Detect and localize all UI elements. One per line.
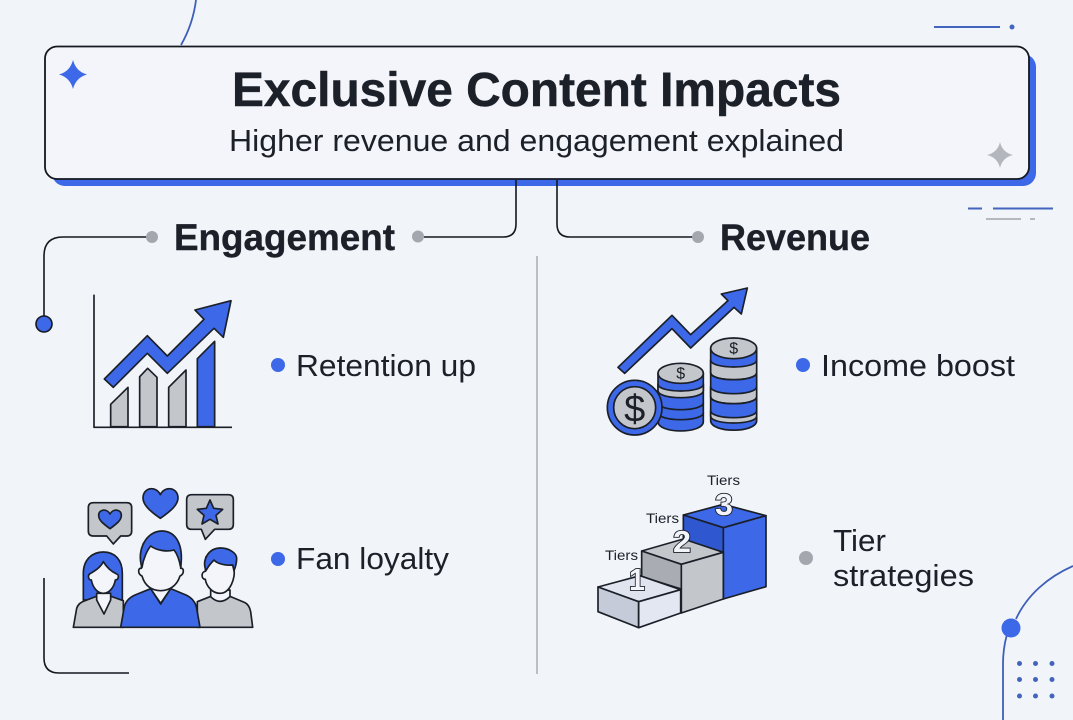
item: Tier strategies: Tier (833, 523, 886, 558)
woman (73, 552, 123, 627)
item: Income boost: Income boost (821, 348, 1015, 383)
icon: blue sparkle (59, 60, 87, 89)
tier labels: Tiers (646, 511, 679, 526)
icon: gray sparkle (987, 142, 1013, 168)
front coin (607, 380, 662, 435)
icon: growth bar chart (94, 295, 232, 427)
step 3 (683, 504, 766, 599)
item: Tier strategies (799, 523, 974, 593)
tier labels (605, 473, 740, 597)
decorative lines top right (934, 24, 1014, 30)
short coin stack (658, 363, 703, 431)
front coin: $ (624, 388, 645, 430)
item: Fan loyalty: Fan loyalty (296, 541, 450, 576)
step 1 (598, 576, 681, 628)
title panel (45, 46, 1036, 186)
arrow (618, 288, 747, 373)
man right (197, 548, 253, 627)
item: Retention up: Retention up (296, 348, 476, 383)
decorative lines right of header (968, 208, 1053, 219)
tier labels: 2 (673, 524, 691, 559)
connector: engagement left (36, 231, 158, 332)
step 2 (642, 539, 723, 613)
icon: coins and arrow (607, 288, 757, 435)
decorative arc and dots bottom right (1002, 566, 1073, 720)
man center (121, 531, 200, 627)
tier labels: 3 (715, 487, 733, 522)
bracket bottom left (44, 578, 129, 673)
decorative arc top left (181, 0, 196, 45)
tier labels: Tiers (605, 548, 638, 563)
short coin stack: $ (676, 366, 685, 383)
subtitle: Higher revenue and engagement explained (229, 123, 844, 158)
heading: Engagement: Engagement (174, 217, 395, 258)
item: Tier strategies: strategies (833, 558, 974, 593)
icon: fans group (73, 489, 253, 627)
tall coin stack: $ (729, 341, 738, 358)
speech bubble heart (88, 503, 132, 544)
tall coin stack (711, 338, 757, 430)
icon: tier steps (598, 504, 766, 628)
heading: Revenue: Revenue (720, 217, 870, 258)
tier labels: Tiers (707, 473, 740, 488)
title: Exclusive Content Impacts (232, 64, 841, 117)
connector: engagement right (412, 180, 516, 242)
speech bubble star (187, 495, 233, 539)
tier labels: 1 (629, 562, 645, 597)
connector: revenue (557, 180, 704, 243)
heart (143, 489, 178, 518)
